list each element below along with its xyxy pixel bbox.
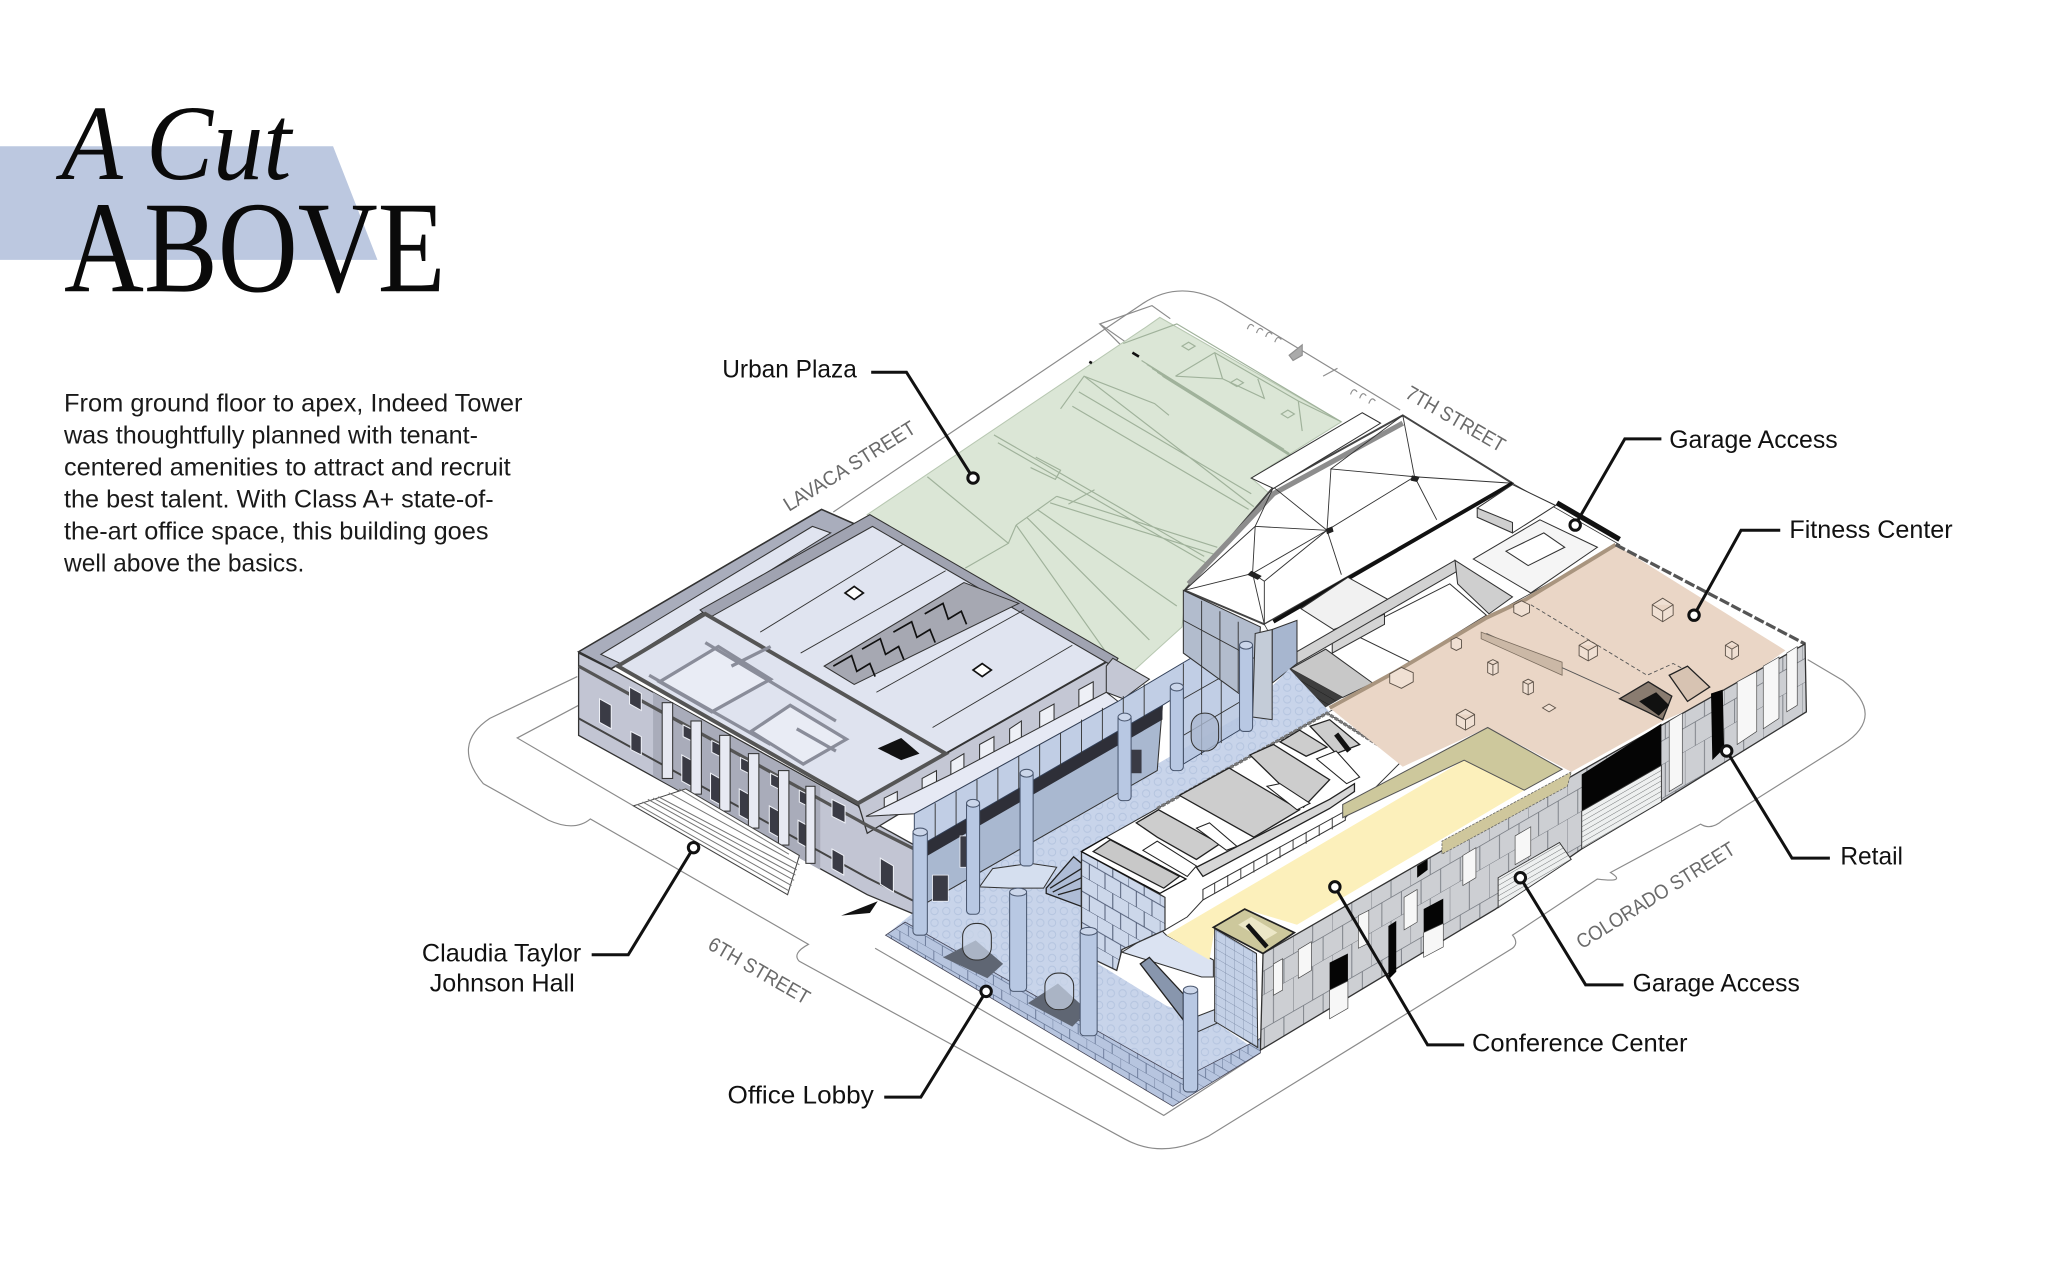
intro text block: was thoughtfully planned with tenant- — [63, 422, 478, 449]
lobby arched window — [960, 836, 973, 867]
panel: street facade — [1260, 644, 1806, 1050]
panel: theater roof — [1185, 413, 1512, 624]
intro text block: the-art office space, this building goes — [64, 518, 488, 545]
title — [56, 85, 445, 320]
museum steps — [633, 789, 799, 895]
panel: office floors — [1081, 713, 1403, 930]
intro text block: the best talent. With Class A+ state-of- — [64, 486, 494, 513]
callout: Claudia Taylor Johnson Hall: Claudia Taylor — [422, 940, 581, 967]
intro text block: centered amenities to attract and recruit — [64, 454, 511, 481]
stair core on roof — [1620, 682, 1672, 720]
museum east windows — [884, 682, 1093, 814]
title accent band — [0, 146, 377, 260]
intro text block: well above the basics. — [63, 550, 304, 577]
museum front wall — [579, 653, 914, 914]
callout: Garage Access south — [1515, 872, 1800, 997]
museum portico columns — [662, 703, 815, 863]
street label: Lavaca: LAVACA STREET — [780, 417, 920, 516]
office white floors — [1143, 751, 1360, 876]
facade dark windows — [1330, 690, 1724, 990]
panel: office lobby — [866, 590, 1330, 1106]
garage opening black band — [1582, 724, 1661, 811]
street furniture on 7th street — [1247, 324, 1375, 404]
museum cornice — [579, 666, 914, 849]
callout: Garage Access south: Garage Access — [1633, 970, 1800, 997]
intro text block — [63, 390, 522, 577]
callout: Claudia Taylor Johnson Hall: Johnson Hall — [430, 970, 575, 997]
callout: Claudia Taylor Johnson Hall — [422, 842, 699, 997]
callout: Retail — [1721, 746, 1903, 871]
callout: Urban Plaza — [722, 356, 978, 483]
office window strip — [1203, 811, 1345, 900]
garage shutter east — [1582, 765, 1661, 849]
portico roof — [618, 614, 946, 803]
roof strip over colonnade — [866, 692, 1118, 816]
callout: Conference Center: Conference Center — [1472, 1030, 1688, 1057]
speckled planter on facade top — [1442, 772, 1571, 854]
callout: Retail: Retail — [1840, 844, 1903, 871]
intro text block: From ground floor to apex, Indeed Tower — [64, 390, 522, 417]
site plan outline — [468, 291, 1865, 1149]
museum windows — [600, 687, 893, 892]
corner room on stone wall — [1081, 837, 1186, 893]
title: A Cut — [56, 85, 293, 203]
office parapet band — [1196, 784, 1354, 876]
stone feature wall — [1081, 852, 1165, 970]
callout: Urban Plaza: Urban Plaza — [722, 356, 857, 383]
title: ABOVE — [64, 176, 445, 320]
callout: Garage Access north: Garage Access — [1669, 427, 1838, 454]
lobby columns — [913, 641, 1253, 1092]
museum east wall — [858, 658, 1113, 833]
main roof — [700, 515, 1118, 754]
callout: Fitness Center — [1689, 517, 1953, 620]
garage shutter west — [1498, 842, 1571, 908]
facade light windows — [1273, 647, 1797, 1019]
callout: Office Lobby — [728, 986, 991, 1110]
callout: Fitness Center: Fitness Center — [1789, 517, 1953, 544]
street label: 7th: 7TH STREET — [1402, 382, 1509, 457]
lobby floor — [886, 669, 1330, 1106]
callout: Conference Center — [1330, 882, 1688, 1057]
street label: Colorado: COLORADO STREET — [1573, 838, 1739, 954]
fitness floor boxes — [1390, 598, 1738, 730]
panel: stair tower — [1213, 909, 1294, 1048]
callout: Garage Access north — [1570, 427, 1838, 530]
office rooms — [1136, 720, 1360, 859]
lobby stairs — [980, 857, 1238, 1032]
street label: 6th: 6TH STREET — [704, 934, 814, 1009]
panel: fitness center — [1330, 545, 1805, 772]
panel: museum (Claudia Taylor Johnson Hall) — [579, 509, 1118, 916]
entablature on museum wall — [579, 718, 914, 901]
lobby doors — [943, 713, 1219, 1027]
panel: conference center — [1166, 728, 1562, 960]
rear wing roof — [579, 509, 854, 669]
panel: urban plaza — [867, 317, 1341, 678]
lobby back wall — [914, 705, 1162, 904]
callout: Office Lobby: Office Lobby — [728, 1083, 874, 1110]
entry arrow marker — [841, 901, 878, 916]
lobby paved edge — [886, 922, 1260, 1106]
panel: central void and rear core — [1264, 483, 1620, 728]
